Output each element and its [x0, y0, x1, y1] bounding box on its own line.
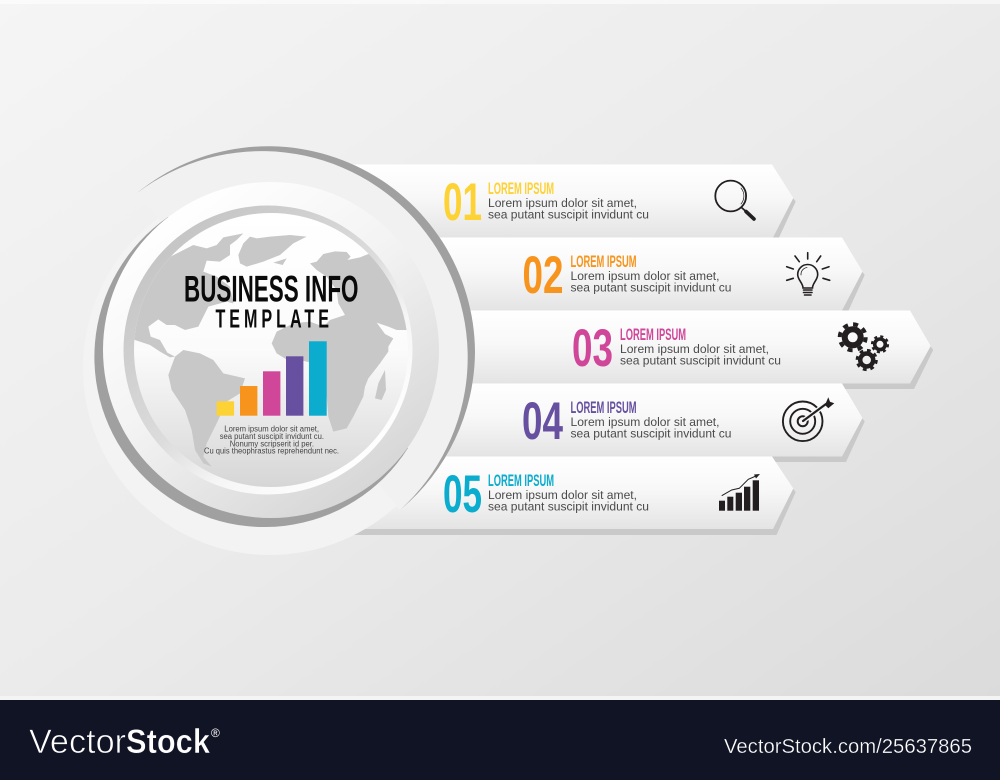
heading 03: LOREM IPSUM	[620, 326, 686, 344]
footer bar	[0, 700, 1000, 780]
panel: ribbon 04	[340, 384, 865, 462]
heading 05: LOREM IPSUM	[488, 472, 554, 490]
circle caption: Cu quis theophrastus reprehendunt nec.	[204, 447, 339, 456]
footer image id: VectorStock.com/25637865	[724, 736, 972, 758]
heading 04: LOREM IPSUM	[570, 399, 636, 417]
world map	[123, 233, 413, 467]
bottom-left grey crescent	[94, 217, 408, 527]
text block 01: sea putant suscipit invidunt cu	[488, 208, 649, 222]
heading 01: LOREM IPSUM	[488, 180, 554, 198]
circle caption: Lorem ipsum dolor sit amet,	[224, 425, 319, 434]
text block 03: sea putant suscipit invidunt cu	[620, 354, 781, 368]
globe base	[134, 213, 408, 487]
bar chart	[217, 341, 327, 416]
panel: central circle	[83, 146, 475, 555]
text block 01: Lorem ipsum dolor sit amet,	[488, 196, 637, 210]
inner fill behind crescent	[137, 146, 475, 510]
text block 03: Lorem ipsum dolor sit amet,	[620, 342, 769, 356]
icon: gears	[840, 324, 888, 370]
number 02: 02	[522, 246, 564, 305]
number 04: 04	[522, 392, 563, 451]
number 01: 01	[443, 173, 482, 232]
subtitle: TEMPLATE	[216, 304, 329, 334]
icon: target with arrow	[783, 397, 834, 441]
panel: ribbon 02	[340, 238, 865, 316]
panel: ribbon 01	[340, 164, 796, 243]
text block 02: sea putant suscipit invidunt cu	[570, 280, 732, 294]
bottom edge strip	[0, 696, 1000, 700]
number 03: 03	[572, 319, 613, 378]
footer logo: Stock	[126, 723, 210, 761]
text block 04: Lorem ipsum dolor sit amet,	[570, 415, 720, 429]
text block 05: sea putant suscipit invidunt cu	[488, 500, 649, 514]
heading 02: LOREM IPSUM	[570, 253, 636, 271]
footer logo	[29, 723, 220, 761]
outer halo disc	[83, 181, 457, 555]
panel: ribbon 05	[340, 456, 796, 535]
text block 05: Lorem ipsum dolor sit amet,	[488, 488, 637, 502]
icon: magnifier	[715, 181, 754, 219]
footer logo: Vector	[29, 723, 126, 761]
text block 04: sea putant suscipit invidunt cu	[570, 426, 732, 440]
text block 02: Lorem ipsum dolor sit amet,	[570, 269, 720, 283]
top edge strip	[0, 0, 1000, 4]
icon: light bulb	[787, 253, 830, 295]
icon: growth chart	[719, 474, 760, 511]
number 05: 05	[443, 465, 482, 524]
globe ring	[124, 206, 412, 494]
circle caption: Nonumy scripserit id per.	[230, 439, 314, 448]
main disc	[103, 182, 439, 518]
footer logo: ®	[211, 726, 220, 740]
panel: ribbon 03	[340, 310, 933, 389]
top-right grey crescent	[137, 146, 475, 510]
title: BUSINESS INFO	[184, 269, 358, 310]
circle caption: sea putant suscipit invidunt cu.	[220, 432, 324, 441]
